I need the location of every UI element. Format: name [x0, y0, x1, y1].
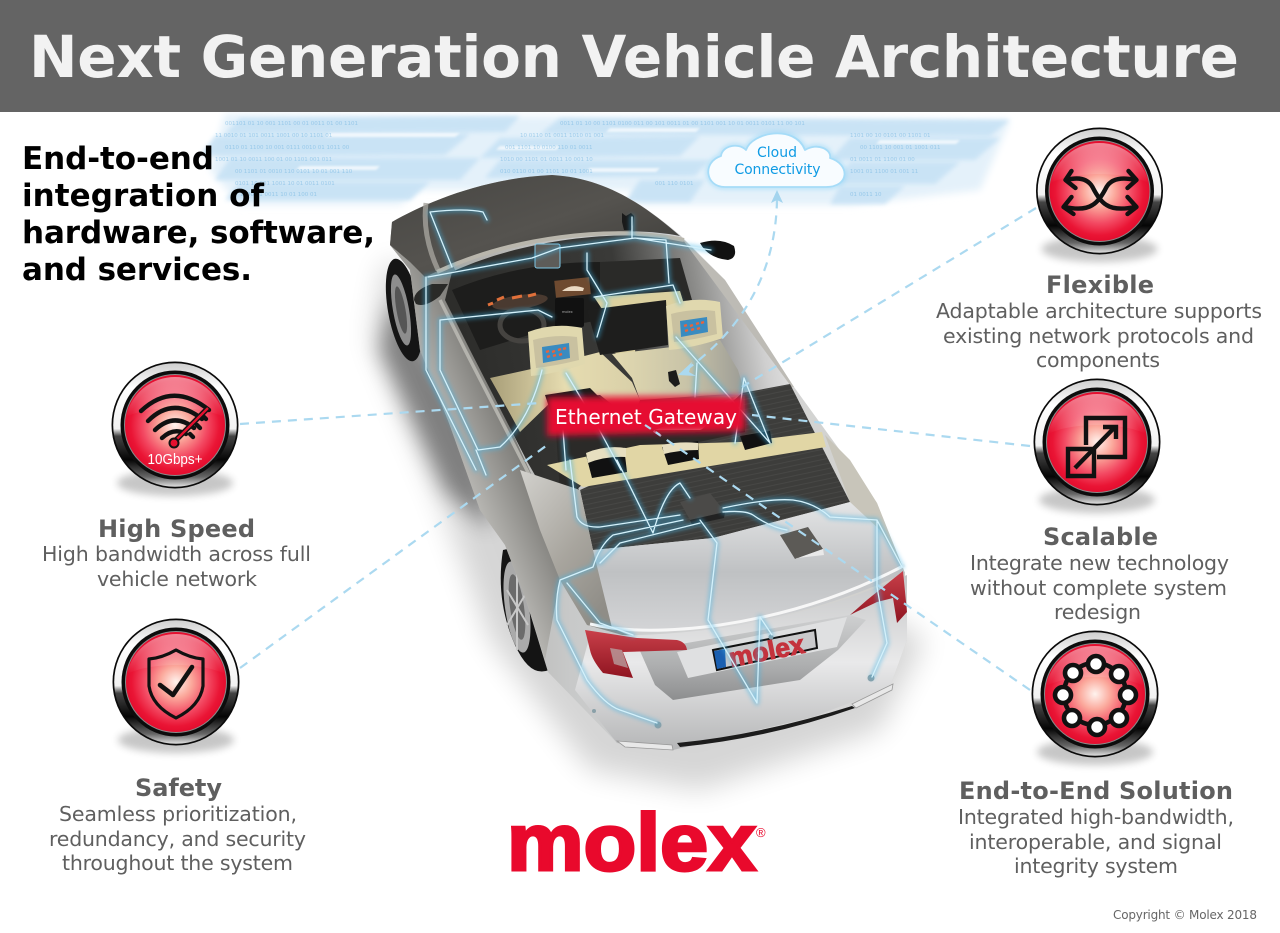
overhead module — [535, 244, 560, 268]
scalable text — [970, 523, 1229, 624]
panel: end-to-end solution — [958, 630, 1234, 878]
car ground shadow — [372, 260, 925, 790]
front seats — [490, 300, 745, 440]
dashboard — [452, 258, 692, 360]
infotainment screen: molex — [562, 310, 573, 314]
cloud connectivity: Cloud — [757, 145, 797, 161]
icon: crossing arrows — [1036, 128, 1163, 262]
trunk recess — [640, 615, 866, 700]
data stream background: 1001 01 1100 01 001 11 — [850, 169, 918, 175]
safety text — [49, 774, 306, 875]
cloud connectivity — [708, 133, 845, 187]
rear bumper — [575, 575, 907, 750]
end-to-end text — [958, 777, 1234, 878]
panel: flexible — [936, 128, 1262, 372]
data stream background: 01 0011 01 1100 01 00 — [850, 157, 915, 163]
windshield header — [437, 233, 684, 272]
high speed text: High Speed — [98, 515, 255, 543]
title bar — [0, 0, 1280, 112]
data stream background: 001 1101 10 0100 110 01 0011 — [505, 145, 592, 151]
data stream background: 01 0011 10 — [850, 192, 882, 198]
bumper black strip — [677, 706, 855, 747]
data stream background: 1010 00 1101 01 0011 10 001 10 — [500, 157, 593, 163]
intro statement: and services. — [22, 252, 252, 288]
end-to-end text: integrity system — [1014, 854, 1178, 878]
rear window — [580, 384, 850, 550]
rear view mirror camera — [622, 213, 634, 230]
cloud connectivity: Connectivity — [734, 162, 820, 178]
intro statement — [22, 141, 375, 288]
cabin glass — [445, 235, 790, 510]
dash trim — [594, 291, 684, 360]
molex logo: molex — [507, 798, 756, 888]
license plate: molex — [726, 629, 807, 673]
data stream background: 00 1101 01 0010 110 0101 10 01 001 110 — [235, 169, 353, 175]
flexible text: components — [1036, 348, 1160, 372]
data stream background: 11 0010 01 101 0011 1001 00 10 1101 01 — [215, 133, 332, 139]
flexible text: existing network protocols and — [943, 324, 1254, 348]
icon: expand squares — [1034, 378, 1160, 513]
flexible text: Adaptable architecture supports — [936, 299, 1262, 323]
trunk lip highlight — [590, 565, 905, 630]
flexible text — [936, 271, 1262, 372]
connector dashed lines — [240, 200, 1036, 690]
scalable text: redesign — [1054, 600, 1141, 624]
intro statement: End-to-end — [22, 141, 214, 177]
ethernet gateway label — [547, 396, 745, 436]
right quarter panel — [825, 435, 905, 573]
seat back rest monitors — [528, 300, 723, 376]
parking sensors — [592, 634, 874, 728]
centre module — [680, 493, 725, 520]
panel: scalable — [970, 378, 1229, 624]
panel: high speed — [42, 362, 311, 591]
end-to-end text: interoperable, and signal — [969, 830, 1222, 854]
safety text: Seamless prioritization, — [59, 802, 297, 826]
bumper lip trims — [617, 684, 893, 750]
end-to-end text: Integrated high-bandwidth, — [958, 805, 1234, 829]
data stream background: 1101 00 10 0101 00 1101 01 — [850, 133, 930, 139]
data stream background: 10 0110 01 0011 1010 01 001 — [520, 133, 604, 139]
hood — [390, 175, 680, 277]
title: Next Generation Vehicle Architecture — [29, 23, 1239, 91]
right wing mirror — [700, 241, 735, 260]
arrowhead to cloud — [771, 190, 783, 203]
end-to-end text: End-to-End Solution — [959, 777, 1233, 805]
icon: wifi speedometer: 10Gbps+ — [148, 451, 203, 468]
wiring harness — [426, 210, 902, 723]
right module — [780, 527, 824, 559]
data stream background: 00 1101 10 001 01 1001 011 — [860, 145, 940, 151]
flexible text: Flexible — [1046, 271, 1154, 299]
left wing mirror — [414, 284, 448, 305]
right side of cabin — [680, 236, 794, 392]
seat sensor — [668, 370, 680, 387]
car illustration — [372, 175, 925, 790]
data stream background: 0101 10 001 1001 10 01 0011 0101 — [235, 181, 335, 187]
scalable text: Scalable — [1043, 523, 1158, 551]
scalable text: Integrate new technology — [970, 551, 1229, 575]
molex logo: ® — [756, 825, 766, 840]
high speed text: High bandwidth across full — [42, 542, 311, 566]
icon: shield check — [112, 618, 240, 753]
data stream background: 001 110 0101 — [655, 181, 694, 187]
data stream background: 001101 01 10 001 1101 00 01 0011 01 00 1101 — [225, 121, 358, 127]
intro statement: integration of — [22, 178, 264, 214]
safety text: throughout the system — [62, 851, 293, 875]
trunk lid — [575, 502, 905, 630]
safety text: redundancy, and security — [49, 827, 306, 851]
panel: safety — [49, 618, 306, 875]
data stream background: 1100 01 0011 10 01 100 01 — [240, 192, 317, 198]
high speed text — [42, 515, 311, 591]
data stream background: 1001 01 10 0011 100 01 00 1101 001 011 — [215, 157, 332, 163]
icon: wifi speedometer — [112, 362, 238, 496]
rear seat shelf — [547, 431, 826, 487]
data stream background: 0011 01 10 00 1101 0100 011 00 101 0011 01 00 1101 001 10 01 0011 0101 11 00 101 — [560, 121, 805, 127]
car body — [390, 175, 907, 750]
rear quarter panel — [520, 470, 640, 640]
infotainment screen — [554, 277, 591, 327]
front wheel — [379, 256, 429, 364]
safety text: Safety — [135, 774, 222, 802]
right tail light — [850, 571, 907, 623]
rear interior — [556, 412, 745, 495]
icon: node ring — [1032, 630, 1158, 765]
copyright: Copyright © Molex 2018 — [1113, 908, 1257, 922]
ethernet gateway label: Ethernet Gateway — [555, 405, 737, 429]
rear wheel — [499, 545, 555, 672]
plate panel — [677, 617, 847, 678]
left tail light — [585, 630, 687, 678]
left door panel — [390, 215, 585, 660]
data stream background — [200, 114, 1010, 205]
data stream background: 010 0110 01 00 1101 10 01 1001 — [500, 169, 593, 175]
intro statement: hardware, software, — [22, 215, 375, 251]
window sill — [440, 300, 550, 515]
scalable text: without complete system — [970, 576, 1227, 600]
arrowhead to seat sensor — [678, 362, 696, 376]
high speed text: vehicle network — [97, 567, 257, 591]
data stream background: 0110 01 1100 10 001 0111 0010 01 1011 00 — [225, 145, 350, 151]
